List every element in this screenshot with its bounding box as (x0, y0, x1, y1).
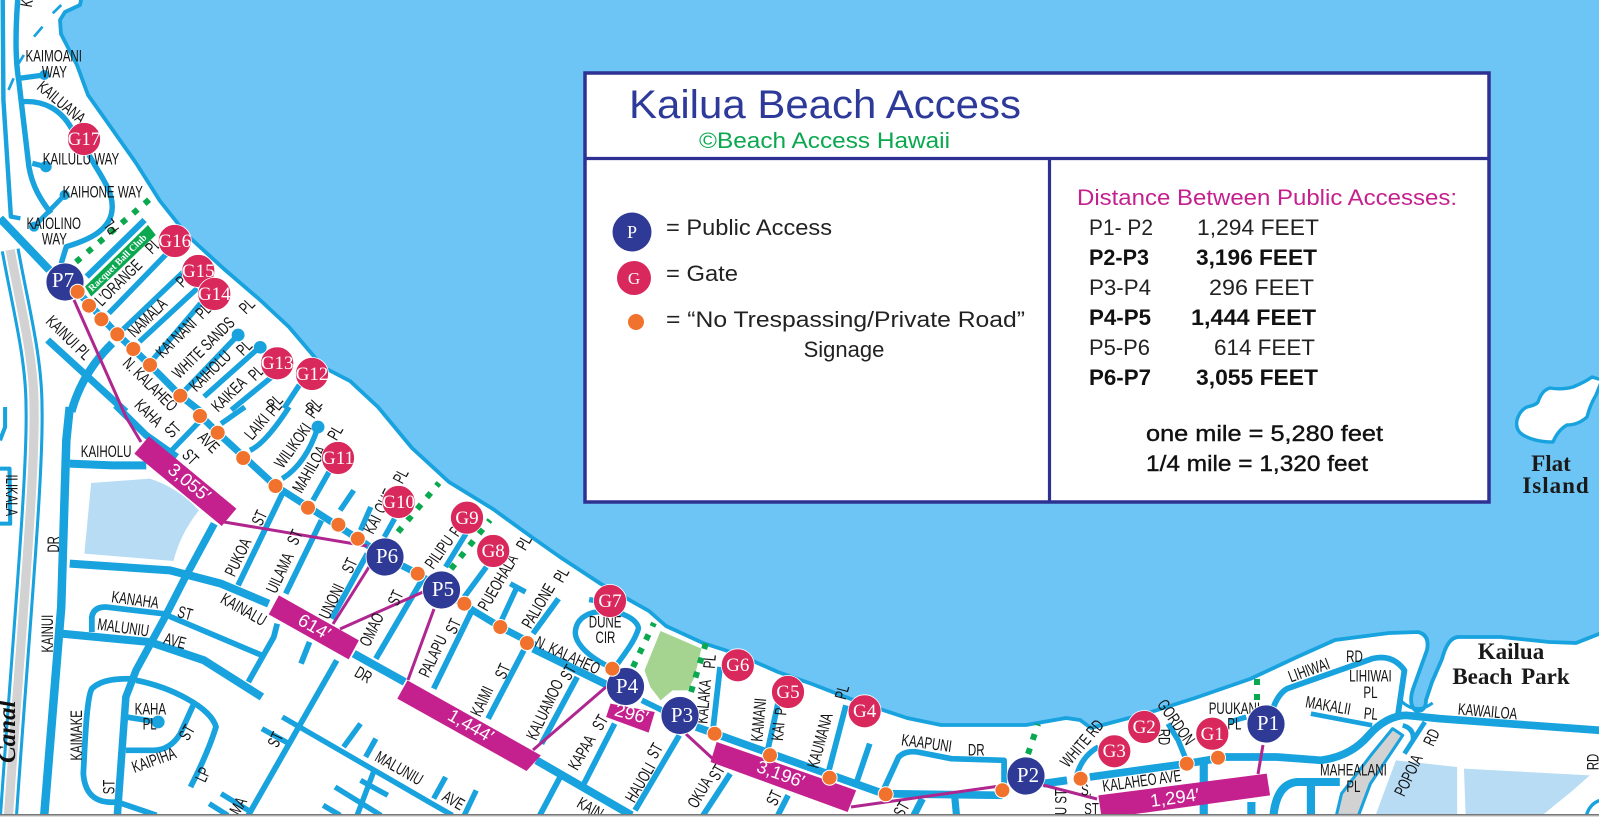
place labels: Island (1522, 473, 1590, 498)
street labels: central: PL (832, 683, 854, 702)
street labels: northwest: WHITE SANDS (169, 314, 239, 383)
access P4 (606, 668, 644, 706)
street labels: northwest: PL (233, 337, 257, 360)
distance table: 296 FEET (1209, 275, 1314, 300)
legend key (612, 212, 1025, 362)
title: Kailua Beach Access (629, 83, 1021, 127)
badge: 296: 296′ (612, 700, 651, 728)
roads: northwest section (0, 0, 299, 412)
street labels: central: DUNE (589, 614, 621, 632)
gate G6: G6 (726, 655, 749, 676)
gate G15 (182, 254, 215, 288)
street labels: central: DR (968, 741, 985, 760)
gate G12 (296, 358, 328, 390)
street labels: east: MAHEALANI (1320, 761, 1387, 780)
street labels: central: KALUAMOO (523, 677, 568, 743)
gate G8 (477, 534, 510, 568)
access P1: P1 (1257, 711, 1279, 735)
street labels: central (519, 565, 1071, 817)
street labels: central: ST (557, 662, 581, 684)
street labels: southwest: OMAO (357, 610, 389, 650)
street labels: southwest: AVE (194, 429, 223, 457)
street labels: northwest: WAY (42, 63, 67, 82)
street labels: southwest: PL (263, 398, 286, 420)
street labels: east: KALAHEO AVE (1101, 767, 1182, 796)
street labels: southwest: KAINALU (217, 590, 269, 630)
street labels: central: CIR (595, 629, 615, 648)
gate G3: G3 (1103, 741, 1126, 762)
access P6: P6 (376, 544, 398, 568)
street labels: southwest: ST (385, 588, 408, 609)
street labels: southwest: WILIKOKI (271, 420, 316, 472)
Flat Island shape (1517, 377, 1599, 442)
street labels: southwest: KAI (361, 512, 386, 537)
gate markers (68, 122, 1229, 768)
street labels: southwest: ST (176, 722, 200, 744)
gate G13: G13 (261, 353, 294, 374)
access P4: P4 (616, 674, 639, 698)
distance table: P1- P2 (1089, 215, 1153, 240)
distance connectors: magenta lines (74, 300, 1263, 807)
distance table: P3-P4 (1089, 275, 1151, 300)
street labels: southwest: DR (45, 536, 64, 553)
distance table: P2-P3 (1089, 245, 1149, 270)
street labels: southwest: UNONI (316, 581, 349, 622)
roads: central section (533, 599, 1067, 815)
place labels: Beach Park (1452, 664, 1570, 689)
badge: 3,196 (711, 742, 856, 812)
street labels: southwest (1, 396, 537, 817)
distance table: 3,196 FEET (1196, 245, 1318, 270)
street labels: northwest (18, 0, 326, 417)
distance table: 1,444 FEET (1191, 305, 1317, 330)
street labels: central: ST (706, 762, 730, 784)
distance table: P6-P7 (1089, 365, 1151, 390)
gate G7 (594, 584, 626, 618)
distance table: 3,055 FEET (1196, 365, 1319, 390)
distance table: one mile = 5,280 feet (1146, 421, 1383, 446)
street labels: southwest: KAHA (135, 700, 166, 719)
street labels: northwest: PL (264, 391, 287, 414)
roads: east section (1076, 658, 1599, 815)
gate G11: G11 (322, 448, 354, 469)
gate G17 (68, 122, 100, 156)
place labels (1452, 451, 1590, 689)
street labels: central: P (772, 707, 791, 716)
street labels: east: POPOIA (1391, 752, 1427, 799)
distance table: Distance Between Public Accesses: (1077, 185, 1457, 210)
street labels: northwest: KAIOLINO (26, 215, 81, 234)
street labels: east: S. (1081, 781, 1092, 800)
legend key: Signage (804, 337, 884, 362)
legend key: P (627, 222, 637, 242)
street labels: southwest: ST (162, 419, 186, 442)
street labels: east: GORDON (1153, 696, 1198, 749)
gate G7: G7 (598, 591, 622, 612)
street labels: southwest: ST (339, 555, 362, 577)
gate G2: G2 (1133, 717, 1156, 738)
legend key: G (628, 269, 640, 288)
street labels: east: LIHIWAI (1349, 667, 1392, 686)
gate G4 (848, 695, 881, 728)
street labels: southwest: LP (192, 765, 215, 785)
street labels: northwest: KAIKEA (208, 374, 251, 416)
street labels: southwest: LAIKI (241, 411, 274, 444)
gate G16: G16 (158, 231, 191, 252)
gate G10 (382, 486, 415, 518)
street labels: central: KAUMANA (804, 711, 838, 770)
street labels: southwest: KAIHOLU (81, 443, 131, 462)
street labels: central: ST (644, 740, 668, 762)
gate G5: G5 (776, 682, 800, 703)
gate G6 (721, 649, 754, 682)
street labels: southwest: PL (390, 466, 413, 487)
street labels: central: OKUA (684, 774, 717, 812)
street labels: southwest: PUKOA (222, 536, 256, 580)
street labels: northwest: KAINUI PL (42, 312, 94, 364)
access P3: P3 (671, 703, 693, 727)
street labels: northwest: L'ORANGE (92, 257, 147, 310)
street labels: east: PL (1363, 684, 1378, 703)
street labels: northwest: PL (142, 235, 165, 258)
street labels: southwest: ST (178, 446, 202, 470)
street labels: southwest: UILAMA (263, 550, 299, 596)
street labels: southwest: PILIPU (422, 533, 458, 573)
street labels: northwest: WAY (42, 230, 67, 249)
street labels: east: RD (1420, 726, 1445, 749)
street labels: southwest: PL (302, 400, 326, 422)
street labels: central: HAUOLI (622, 760, 660, 806)
street labels: central: KAI (769, 722, 789, 741)
access P5: P5 (432, 577, 454, 601)
street labels: central: PALIONE (519, 581, 560, 632)
street labels: northwest: KAI NANI (153, 315, 201, 362)
street labels: southwest: PL (513, 532, 537, 554)
canal (9, 250, 34, 815)
gate G16 (158, 224, 191, 258)
beach access paths: green dashed lines (76, 199, 1257, 754)
gate G13 (261, 347, 294, 380)
street labels: east: LIHIWAI (1286, 655, 1333, 687)
street labels: southwest: DR (351, 664, 375, 688)
badge: 3,196: 3,196′ (754, 757, 808, 792)
park: green area (645, 631, 701, 700)
roads: southwest section (0, 405, 536, 815)
distance table: 614 FEET (1214, 335, 1315, 360)
street labels: southwest: ST (492, 661, 515, 682)
street labels: northwest: PL (236, 295, 259, 318)
street labels: east: PL (1346, 778, 1361, 797)
street labels: central: KALAKA (693, 679, 716, 724)
street labels: northwest: PL (173, 269, 196, 292)
badge: 1,444: 1,444′ (444, 705, 498, 747)
street labels: southwest: KAIMI (468, 684, 498, 720)
street labels: east: PUUKANI (1209, 700, 1260, 719)
street labels: northwest: KAILUANA (33, 78, 89, 128)
street labels: northwest: PL (100, 215, 124, 237)
street labels: southwest: PL (324, 422, 348, 444)
access P7 (46, 263, 84, 301)
street labels: northwest: KAIMOANI (25, 48, 82, 66)
street labels: east (1057, 648, 1599, 817)
gate G9 (450, 501, 484, 534)
street labels: southwest: PL (446, 518, 470, 540)
gate G17: G17 (68, 129, 100, 150)
copyright line: ©Beach Access Hawaii (699, 128, 950, 153)
gate G1: G1 (1201, 724, 1224, 745)
street labels: southwest: KAIPIHA (129, 744, 179, 777)
legend key: = Gate (666, 261, 738, 286)
street labels: east: WHITE RD (1057, 717, 1108, 771)
street labels: east: PL (1227, 715, 1241, 734)
access P7: P7 (52, 268, 74, 292)
access P1 (1247, 705, 1285, 743)
gate G3 (1098, 735, 1131, 768)
street labels: east: MAKALII (1304, 693, 1352, 719)
public access markers (46, 263, 1285, 795)
legend panel (585, 73, 1489, 502)
street labels: southwest: ST (284, 527, 307, 548)
street labels: southwest: MALUNIU (96, 616, 150, 641)
gate G1 (1196, 717, 1229, 750)
badge: 296 (606, 700, 655, 733)
access P2: P2 (1017, 763, 1039, 787)
street labels: southwest: ST (249, 508, 272, 529)
street labels: northwest: KAILULU WAY (43, 151, 120, 169)
street labels: northwest: KAIHOLU (186, 348, 236, 396)
street labels: northwest: PL (303, 395, 326, 417)
signage markers: orange dots (82, 298, 1226, 802)
street labels: southwest: KAIMAKE (68, 710, 87, 760)
gate G11 (322, 442, 354, 474)
access P3 (661, 696, 699, 734)
street labels: northwest: PL (192, 300, 216, 323)
distance table (1077, 185, 1457, 476)
gate G8: G8 (482, 541, 505, 562)
street labels: southwest: ST (175, 603, 195, 625)
street labels: east: PL (1363, 705, 1379, 725)
gate G5 (772, 676, 804, 708)
legend key: = Public Access (666, 215, 832, 240)
badge: 614: 614′ (294, 610, 335, 644)
gate G9: G9 (455, 508, 479, 529)
street labels: central: ST (763, 788, 787, 809)
badge: 1,444 (397, 680, 541, 771)
access P5 (422, 571, 460, 609)
distance table: P4-P5 (1089, 305, 1151, 330)
street labels: central: KAPAA (565, 732, 600, 774)
distance table: 1,294 FEET (1197, 215, 1319, 240)
street labels: southwest: MALUNIU (371, 748, 426, 790)
badge: 1,294 (1098, 774, 1270, 817)
street labels: southwest: MAHILOA (289, 443, 332, 496)
street labels: east: KAWAILOA (1457, 701, 1518, 724)
place labels: Kailua (1478, 639, 1545, 664)
access P6 (366, 538, 404, 576)
gate G4: G4 (853, 701, 877, 722)
street labels: southwest: ST (100, 780, 119, 794)
street labels: central: PL (551, 565, 574, 586)
street labels: northwest: NAMALA (125, 295, 172, 341)
street labels: southwest: KAHA (130, 396, 166, 431)
street labels: northwest: KAIHONE WAY (63, 183, 143, 202)
street labels: central: ST (589, 712, 613, 734)
street labels: southwest: ILIKALA (1, 475, 20, 516)
legend key: = “No Trespassing/Private Road” (666, 307, 1025, 332)
gate G10: G10 (382, 492, 415, 513)
access P2 (1007, 757, 1045, 795)
street labels: central: PL (701, 654, 721, 669)
street labels: central: KAMANI (748, 697, 771, 742)
street labels: northwest: PL (245, 362, 269, 385)
street labels: central: N. KALAHEO (532, 633, 603, 679)
street labels: southwest: KAINUI (39, 615, 58, 653)
gate G14 (198, 278, 231, 310)
street labels: southwest: PUEOHALA (475, 551, 523, 614)
street labels: southwest: ST (443, 616, 466, 637)
place labels: Flat (1531, 451, 1571, 476)
racquet ball club: Racquet Ball Club (87, 232, 150, 294)
gate G15: G15 (182, 261, 215, 282)
badge: 3,055 (134, 436, 236, 526)
badge: 614 (269, 595, 359, 659)
distance table: P5-P6 (1089, 335, 1150, 360)
signage dots over access markers (70, 284, 620, 676)
street labels: southwest: AVE (161, 630, 188, 654)
street labels: southwest: OHE (371, 486, 399, 517)
street labels: northwest: N. KALAHEO (118, 354, 181, 416)
street labels: east: RD (1346, 648, 1363, 667)
badge: 3,055: 3,055′ (164, 459, 215, 506)
street labels: southwest: ST (265, 729, 288, 751)
street labels: central: KAAPUNI (900, 731, 953, 757)
street labels: southwest: PALAPU (416, 633, 452, 680)
street labels: southwest: AVE (439, 788, 467, 815)
distance badges (134, 436, 1270, 817)
badge: 1,294: 1,294′ (1149, 785, 1201, 811)
bottom edge strip (0, 814, 1599, 817)
street labels: southwest: KANAHA (110, 588, 160, 613)
gate G2 (1128, 710, 1161, 744)
gate G12: G12 (296, 364, 328, 385)
distance table: 1/4 mile = 1,320 feet (1146, 451, 1368, 476)
gate G14: G14 (198, 284, 231, 305)
street labels: east: RD (1154, 729, 1173, 745)
street labels: southwest: PL (143, 715, 157, 734)
